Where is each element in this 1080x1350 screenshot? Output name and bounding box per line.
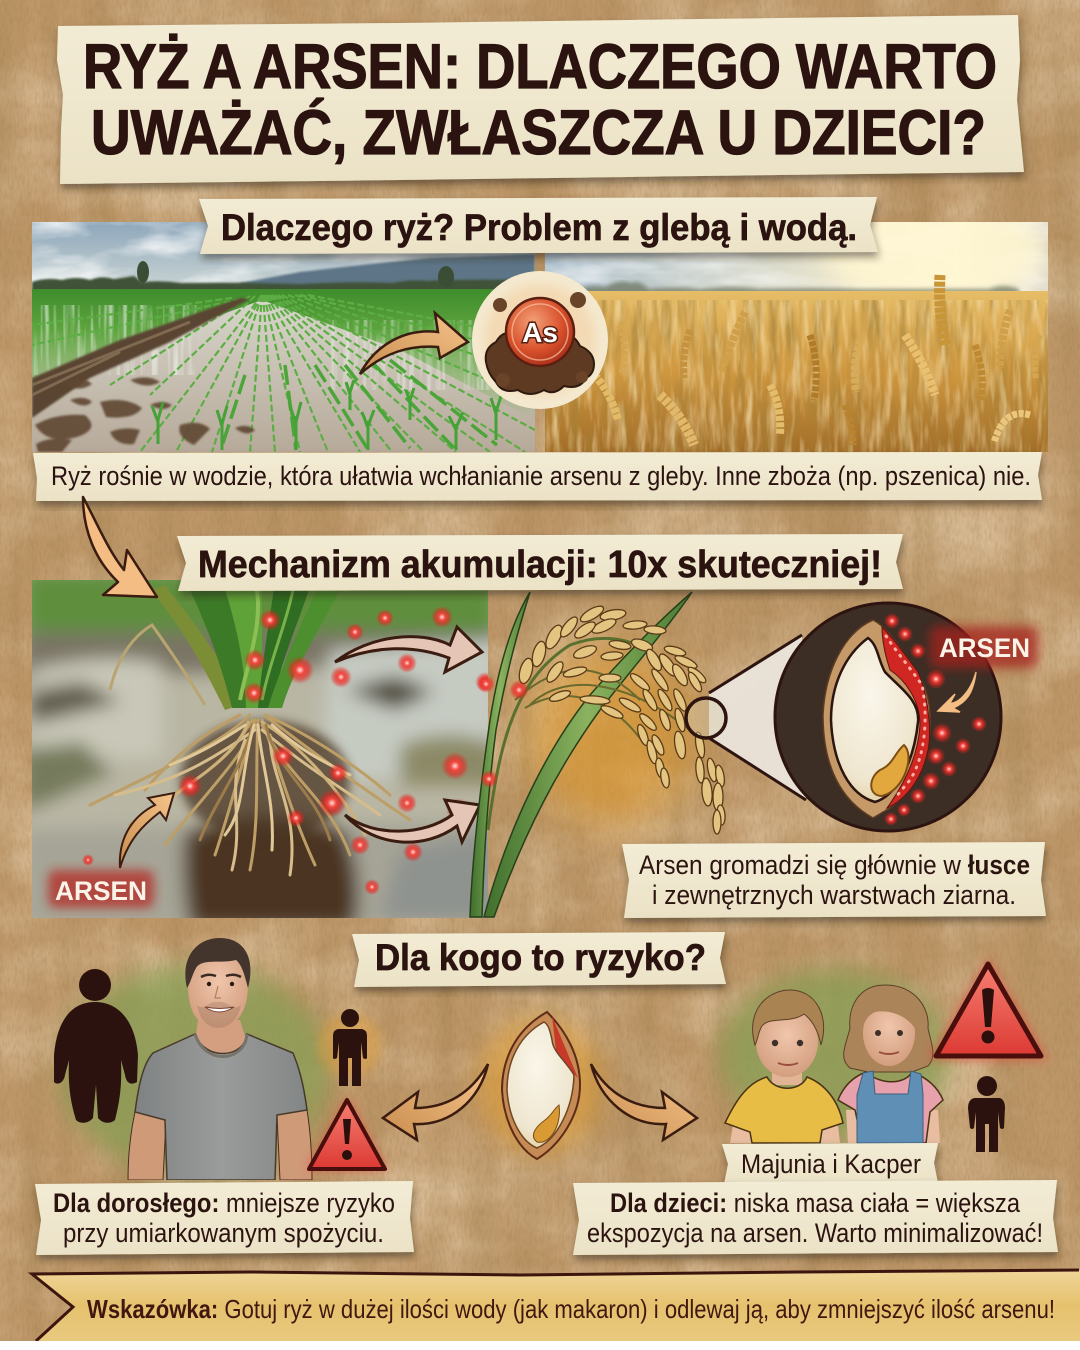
arsenic dots in grain	[884, 613, 987, 826]
boy	[725, 990, 843, 1143]
section banner: mechanism: Mechanizm akumulacji: 10x skuteczniej!	[198, 544, 882, 586]
grain husk	[823, 620, 930, 818]
glow: small person adult	[318, 1013, 382, 1077]
grain panicle	[517, 603, 726, 834]
section banner: who is at risk: Dla kogo to ryzyko?	[375, 937, 706, 978]
figure: children	[725, 985, 943, 1143]
arrow: grain to adult	[383, 1064, 488, 1140]
icon: arsenic in soil	[472, 271, 608, 409]
dike	[32, 298, 250, 418]
rice rows	[32, 295, 535, 452]
arsenic dots	[82, 606, 495, 895]
title text	[83, 32, 997, 168]
label: arsen in water: ARSEN	[55, 876, 147, 906]
arrow: from roots to stem	[345, 800, 480, 842]
photo: flooded rice field	[32, 222, 555, 454]
icon: large body silhouette	[54, 969, 138, 1123]
illustration: rice plant	[470, 592, 726, 917]
section banner: who is at risk	[352, 932, 726, 987]
arrow: grain to children	[591, 1064, 697, 1140]
title banner	[57, 15, 1024, 184]
bottom white strip	[0, 1341, 1080, 1350]
label: children's names: Majunia i Kacper	[741, 1149, 921, 1179]
photo: wheat field	[545, 222, 1048, 452]
leaves and stem	[470, 592, 692, 917]
label: arsen in grain: ARSEN	[939, 633, 1030, 663]
grain kernel	[831, 638, 918, 802]
caption: adult: przy umiarkowanym spożyciu.	[63, 1218, 384, 1248]
label: children's names	[722, 1143, 938, 1184]
magnifier	[686, 603, 1001, 831]
roots	[180, 720, 350, 840]
icon: small person adult	[333, 1009, 367, 1086]
girl	[838, 985, 943, 1143]
photo: rice plant roots in water	[22, 570, 498, 928]
caption: adult	[35, 1181, 414, 1255]
figure: adult man	[128, 938, 312, 1180]
icon: small person child	[968, 1076, 1005, 1152]
caption: children	[573, 1180, 1058, 1255]
plant stems	[110, 580, 345, 710]
icon: warning children	[928, 958, 1048, 1060]
caption: adult: Dla dorosłego: mniejsze ryzyko	[53, 1188, 395, 1218]
arrow: caption to roots	[83, 497, 157, 597]
arrow: field to soil	[360, 313, 468, 374]
caption: arsenic in the husk	[622, 842, 1046, 918]
tip banner	[32, 1270, 1080, 1341]
dots on leaves	[477, 675, 529, 788]
icon: warning adult	[307, 1098, 387, 1170]
green halo: adult	[60, 965, 330, 1175]
label: arsen in grain	[930, 626, 1038, 668]
illustration: rice grain center	[478, 1012, 602, 1159]
caption: rice field	[33, 452, 1042, 501]
section banner: why rice	[199, 197, 878, 254]
green halo: children	[720, 970, 950, 1140]
arrow: arsen into root	[120, 793, 174, 868]
icon: arsenic in soil: As	[522, 317, 558, 348]
caption: arsenic in the husk: Arsen gromadzi się głównie w łusce	[639, 850, 1030, 880]
section heading: Dlaczego ryż? Problem z glebą i wodą.	[221, 207, 857, 248]
caption: children: Dla dzieci: niska masa ciała = większa	[610, 1188, 1021, 1218]
red arsenic layer	[882, 627, 930, 808]
caption: arsenic in the husk: i zewnętrznych warstwach ziarna.	[652, 880, 1016, 910]
arrow: upward through stem	[335, 627, 482, 672]
